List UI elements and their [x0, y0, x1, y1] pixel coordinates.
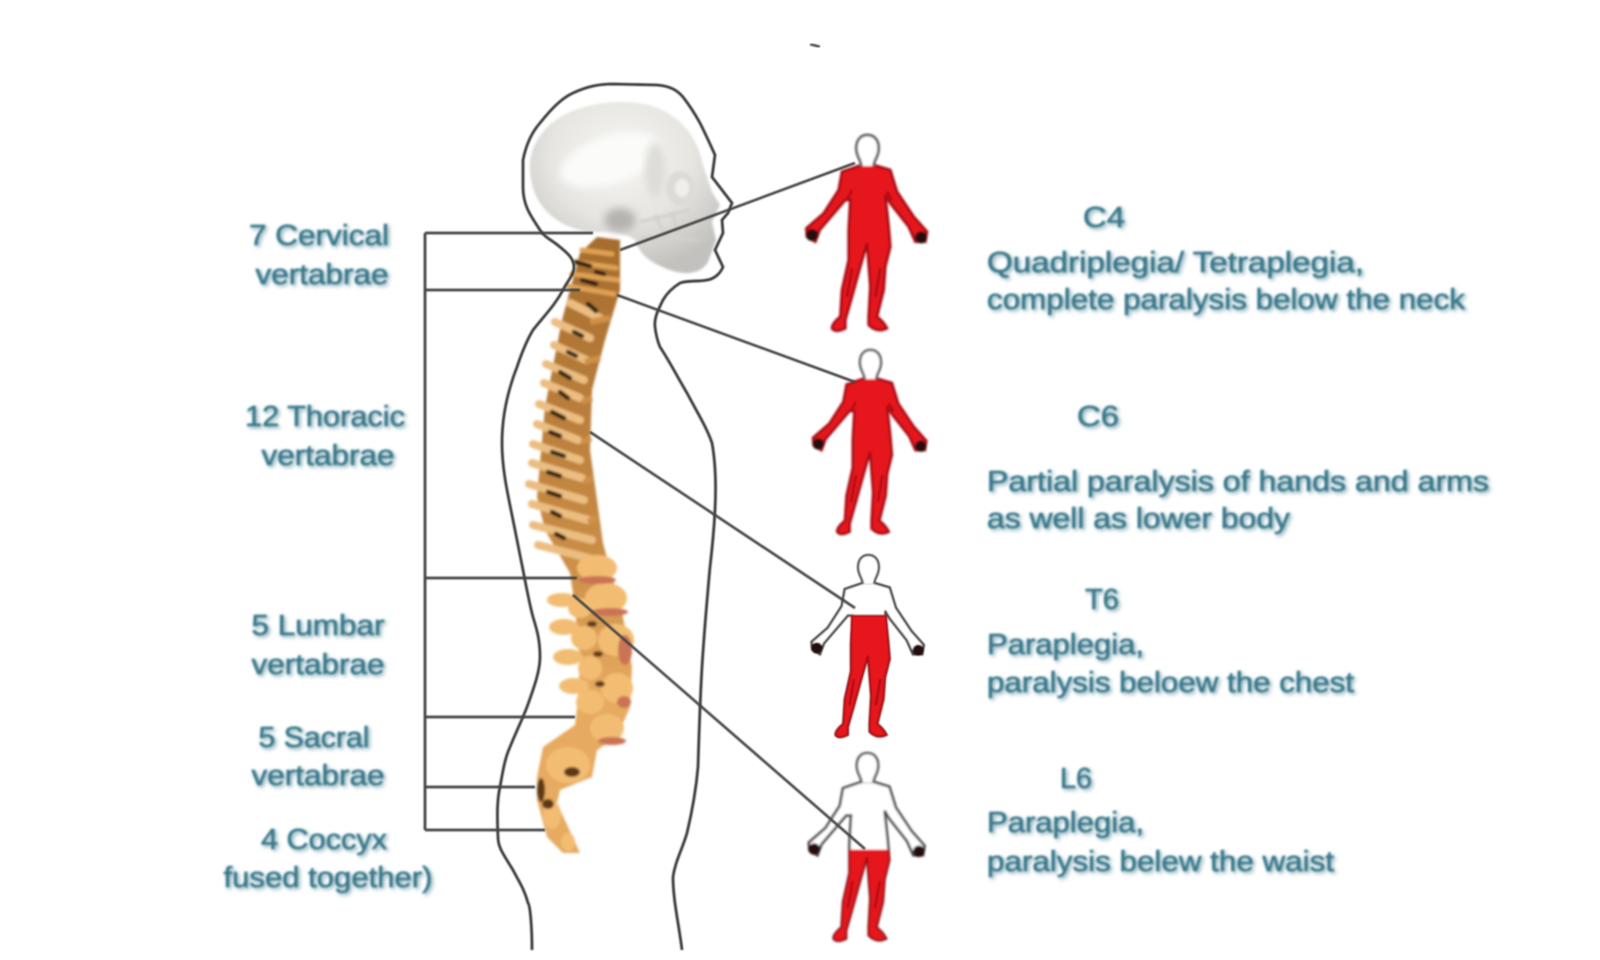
label: coccyx — [224, 824, 432, 894]
label: lumbar: vertabrae — [252, 649, 384, 681]
text: C4 — [987, 202, 1466, 316]
label: sacral — [252, 722, 384, 792]
text: T6: Paraplegia, — [987, 629, 1144, 661]
injury level descriptions — [987, 202, 1489, 878]
label: cervical: 7 Cervical — [249, 220, 389, 252]
text: C6: C6 — [1077, 401, 1119, 433]
label: coccyx: fused together) — [224, 862, 432, 894]
label: thoracic: 12 Thoracic — [245, 401, 405, 433]
label: lumbar: 5 Lumbar — [252, 610, 385, 642]
text: T6: T6 — [1085, 584, 1119, 616]
text: L6: Paraplegia, — [987, 807, 1144, 839]
text: L6: L6 — [1060, 763, 1092, 795]
bracket and level leader lines — [425, 233, 593, 830]
text: C6: as well as lower body — [987, 503, 1291, 535]
figure: L6 body — [808, 753, 925, 941]
label: cervical — [249, 220, 389, 291]
label: sacral: 5 Sacral — [258, 722, 370, 754]
figure: C4 body — [806, 135, 927, 331]
text: T6: paralysis beloew the chest — [987, 667, 1354, 699]
text: T6 — [987, 584, 1354, 699]
body side-profile outline — [497, 84, 732, 950]
label: thoracic — [245, 401, 405, 472]
label: lumbar — [252, 610, 385, 681]
spine anatomy illustration — [497, 84, 732, 950]
text: L6 — [987, 763, 1334, 878]
text: L6: paralysis belew the waist — [987, 846, 1334, 878]
small mark at top — [810, 44, 820, 47]
figure: C6 body — [813, 350, 926, 534]
label: cervical: vertabrae — [256, 259, 388, 291]
label: thoracic: vertabrae — [262, 440, 394, 472]
text: C6 — [987, 401, 1489, 535]
text: C6: Partial paralysis of hands and arms — [987, 466, 1489, 498]
label: coccyx: 4 Coccyx — [261, 824, 388, 856]
text: C4: C4 — [1083, 202, 1125, 234]
connector lines from spine to body figures — [573, 163, 865, 849]
label: sacral: vertabrae — [252, 760, 384, 792]
spine column — [529, 237, 634, 853]
text: C4: Quadriplegia/ Tetraplegia, — [987, 247, 1364, 279]
text: C4: complete paralysis below the neck — [987, 284, 1466, 316]
skull — [530, 102, 720, 273]
vertebrae labels — [224, 220, 432, 894]
figure: T6 body — [811, 555, 924, 737]
